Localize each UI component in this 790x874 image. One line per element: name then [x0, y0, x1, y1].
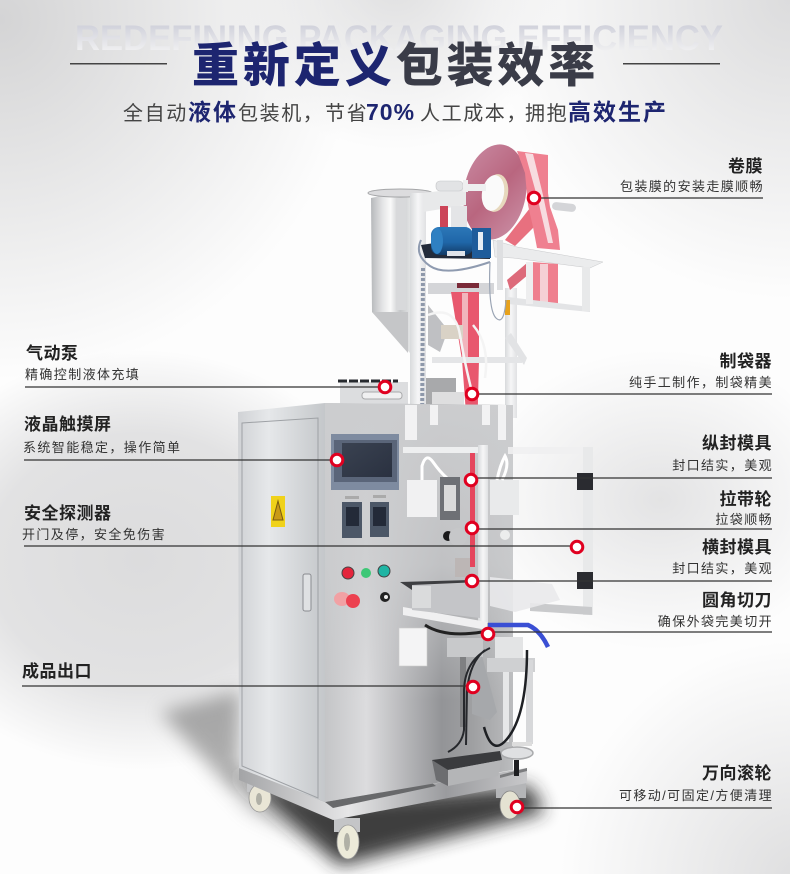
subtitle: 高效生产 [568, 99, 668, 125]
subtitle: 拥抱 [525, 102, 568, 125]
cabinet base [239, 768, 527, 820]
title: 重新定义包装效率 [192, 39, 599, 92]
label: round cutter: 圆角切刀 [702, 590, 772, 610]
label: horizontal seal: 封口结实，美观 [672, 561, 773, 576]
label: round cutter: 确保外袋完美切开 [658, 614, 773, 629]
pump assembly [338, 378, 464, 406]
label: safety detector: 开门及停，安全免伤害 [22, 527, 166, 542]
subtitle: 液体 [188, 99, 238, 125]
subtitle: 全自动 [123, 102, 188, 125]
label: film roll: 包装膜的安装走膜顺畅 [620, 179, 764, 194]
temperature controllers [342, 495, 389, 538]
ghost English heading: REDEFINING PACKAGING EFFICIENCY [75, 19, 723, 58]
label: bag former: 制袋器 [720, 352, 772, 371]
label: vertical seal [672, 434, 773, 473]
subtitle: 人工成本， [420, 102, 528, 125]
marker dots [331, 192, 583, 813]
label: safety detector: 安全探测器 [24, 503, 112, 523]
uprights [410, 180, 576, 438]
floor shadow [160, 690, 545, 866]
touch screen [331, 434, 399, 490]
door handle [303, 574, 311, 611]
subtitle: 包装机， [238, 102, 324, 125]
label: safety detector [22, 503, 166, 542]
label: pull wheel: 拉带轮 [720, 489, 772, 509]
cabinet door [238, 403, 325, 802]
label: touch screen [23, 415, 181, 455]
label: outlet: 成品出口 [22, 661, 92, 681]
label: round cutter [658, 590, 773, 629]
label: pneumatic pump: 精确控制液体充填 [25, 367, 140, 382]
label: touch screen: 系统智能稳定，操作简单 [23, 440, 181, 455]
lower frame [403, 405, 593, 630]
hopper [368, 189, 432, 353]
cabinet side panel [325, 403, 513, 802]
warning sign [271, 496, 285, 527]
label: pneumatic pump [25, 344, 140, 382]
subtitle: 节省 [325, 102, 368, 125]
label: casters: 万向滚轮 [702, 763, 772, 783]
label: casters [619, 763, 773, 803]
label: vertical seal: 纵封模具 [702, 434, 772, 453]
label: bag former: 纯手工制作，制袋精美 [629, 375, 773, 390]
sealer, boxes and vertical film [407, 453, 519, 577]
machine [160, 139, 603, 866]
subtitle: 70% [366, 99, 415, 125]
label: horizontal seal: 横封模具 [702, 538, 772, 557]
label: touch screen: 液晶触摸屏 [24, 415, 112, 434]
sealing trays [400, 577, 560, 618]
hinges [577, 473, 593, 589]
cutter and cables [399, 625, 548, 786]
leader lines [22, 198, 772, 808]
label: film roll: 卷膜 [728, 157, 763, 176]
control buttons [334, 565, 390, 608]
film roll [456, 139, 560, 250]
label: pull wheel: 拉袋顺畅 [715, 512, 773, 527]
label: pneumatic pump: 气动泵 [26, 344, 78, 363]
label: vertical seal: 封口结实，美观 [672, 458, 773, 473]
label: casters: 可移动/可固定/方便清理 [619, 788, 773, 803]
motor [421, 227, 491, 259]
tensioner arms and film [419, 240, 603, 440]
label: pull wheel [715, 489, 773, 527]
label: film roll [620, 157, 764, 194]
label: bag former [629, 352, 773, 390]
label: horizontal seal [672, 538, 773, 576]
casters [247, 780, 526, 859]
